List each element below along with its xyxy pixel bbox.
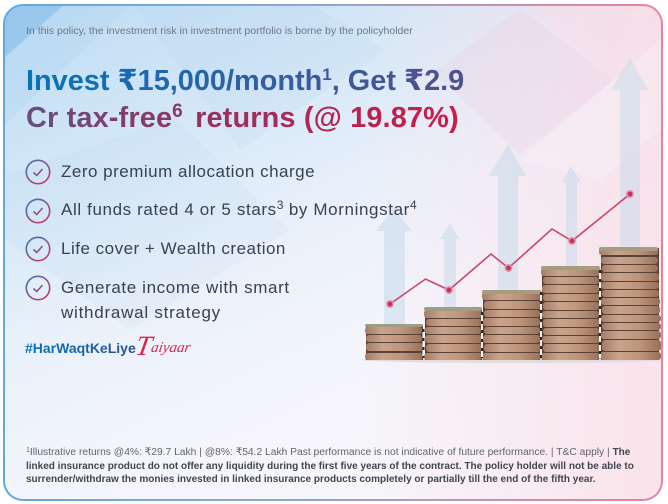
footnote: [26, 447, 634, 485]
trend line: [387, 191, 633, 307]
hashtag logo: [25, 331, 192, 362]
rising arrows: [376, 58, 648, 326]
benefit 2: All funds rated 4 or 5 stars3 by Morningstar4: [61, 198, 417, 219]
benefit 3: Life cover + Wealth creation: [61, 239, 286, 258]
main heading: Invest ₹15,000/month1, Get ₹2.9: [26, 65, 464, 97]
benefit 3: [26, 236, 286, 262]
benefit 4: Generate income with smart: [61, 278, 290, 297]
footnote: 1Illustrative returns @4%: ₹29.7 Lakh | @8%: ₹54.2 Lakh Past performance is not indicative of future performance. | T&C apply | The: [26, 447, 630, 458]
hashtag text: #HarWaqtKeLiye: [25, 340, 136, 356]
main heading: [26, 65, 464, 134]
footnote: linked insurance product do not offer any liquidity during the first five years of the contract. The policy holder will not be able to: [26, 460, 634, 472]
main heading: Cr tax-free6 returns (@ 19.87%): [26, 100, 459, 134]
script word: Taiyaar: [133, 331, 192, 362]
coin stacks: [362, 247, 662, 363]
benefit 4: withdrawal strategy: [61, 303, 221, 322]
benefit 4: [26, 276, 290, 322]
benefit 1: Zero premium allocation charge: [61, 162, 315, 181]
benefit 1: [26, 160, 315, 184]
footnote: surrender/withdraw the monies invested in linked insurance products completely or partially till the end of the fifth year.: [26, 474, 596, 485]
checklist: benefits: [26, 160, 417, 322]
disclaimer note: In this policy, the investment risk in investment portfolio is borne by the policyholder: [26, 25, 413, 37]
